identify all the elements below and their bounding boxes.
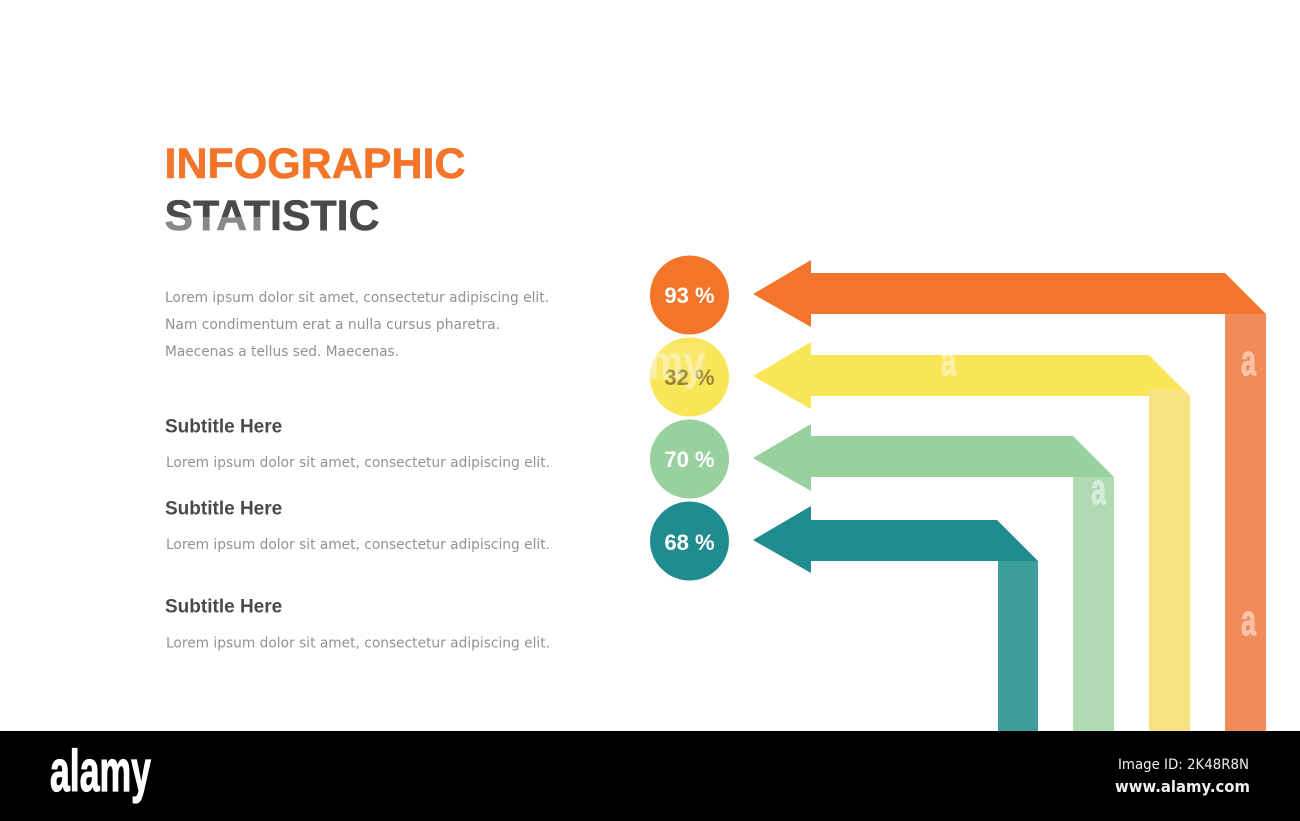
arrow: orange: a	[1241, 596, 1256, 645]
text block: subtitle 2	[165, 498, 550, 553]
badge: 32 percent	[648, 337, 729, 416]
text block: subtitle 3	[165, 596, 550, 652]
badge: 70 percent	[650, 420, 729, 498]
badge: 93 percent	[650, 256, 729, 334]
text block: subtitle 2: Subtitle Here	[165, 498, 282, 520]
text block: subtitle 3: Subtitle Here	[165, 596, 282, 618]
arrow: green	[753, 424, 1114, 731]
footer bar	[0, 731, 1300, 821]
intro text block	[165, 290, 549, 360]
arrow: yellow	[753, 336, 1190, 731]
arrow: green: a	[1091, 465, 1106, 514]
badge: 68 percent	[650, 502, 729, 580]
text block: subtitle 1: Subtitle Here	[165, 416, 282, 438]
title	[164, 140, 466, 240]
arrow: orange: a	[1241, 336, 1256, 385]
title: INFOGRAPHIC	[164, 140, 466, 188]
arrow: orange	[753, 260, 1266, 731]
badge: 93 percent: 93 %	[664, 283, 715, 308]
badge: 70 percent: 70 %	[664, 447, 715, 472]
intro text block: Nam condimentum erat a nulla cursus pharetra.	[165, 317, 500, 333]
arrow: teal	[753, 506, 1038, 731]
text block: subtitle 2: Lorem ipsum dolor sit amet, consectetur adipiscing elit.	[166, 537, 550, 553]
text block: subtitle 3: Lorem ipsum dolor sit amet, consectetur adipiscing elit.	[166, 636, 550, 652]
badge: 32 percent: 32 %	[664, 365, 715, 390]
image id: Image ID: 2K48R8N	[1118, 757, 1249, 773]
text block: subtitle 1: Lorem ipsum dolor sit amet, consectetur adipiscing elit.	[166, 455, 550, 471]
footer logo: alamy	[50, 739, 151, 804]
intro text block: Maecenas a tellus sed. Maecenas.	[165, 344, 399, 360]
title: STATISTIC	[164, 192, 380, 240]
website: www.alamy.com	[1115, 777, 1250, 796]
badge: 68 percent: 68 %	[664, 530, 715, 555]
badge: 32 percent: my	[648, 337, 705, 390]
intro text block: Lorem ipsum dolor sit amet, consectetur adipiscing elit.	[165, 290, 549, 306]
text block: subtitle 1	[165, 416, 550, 471]
arrow: yellow: a	[941, 336, 956, 385]
